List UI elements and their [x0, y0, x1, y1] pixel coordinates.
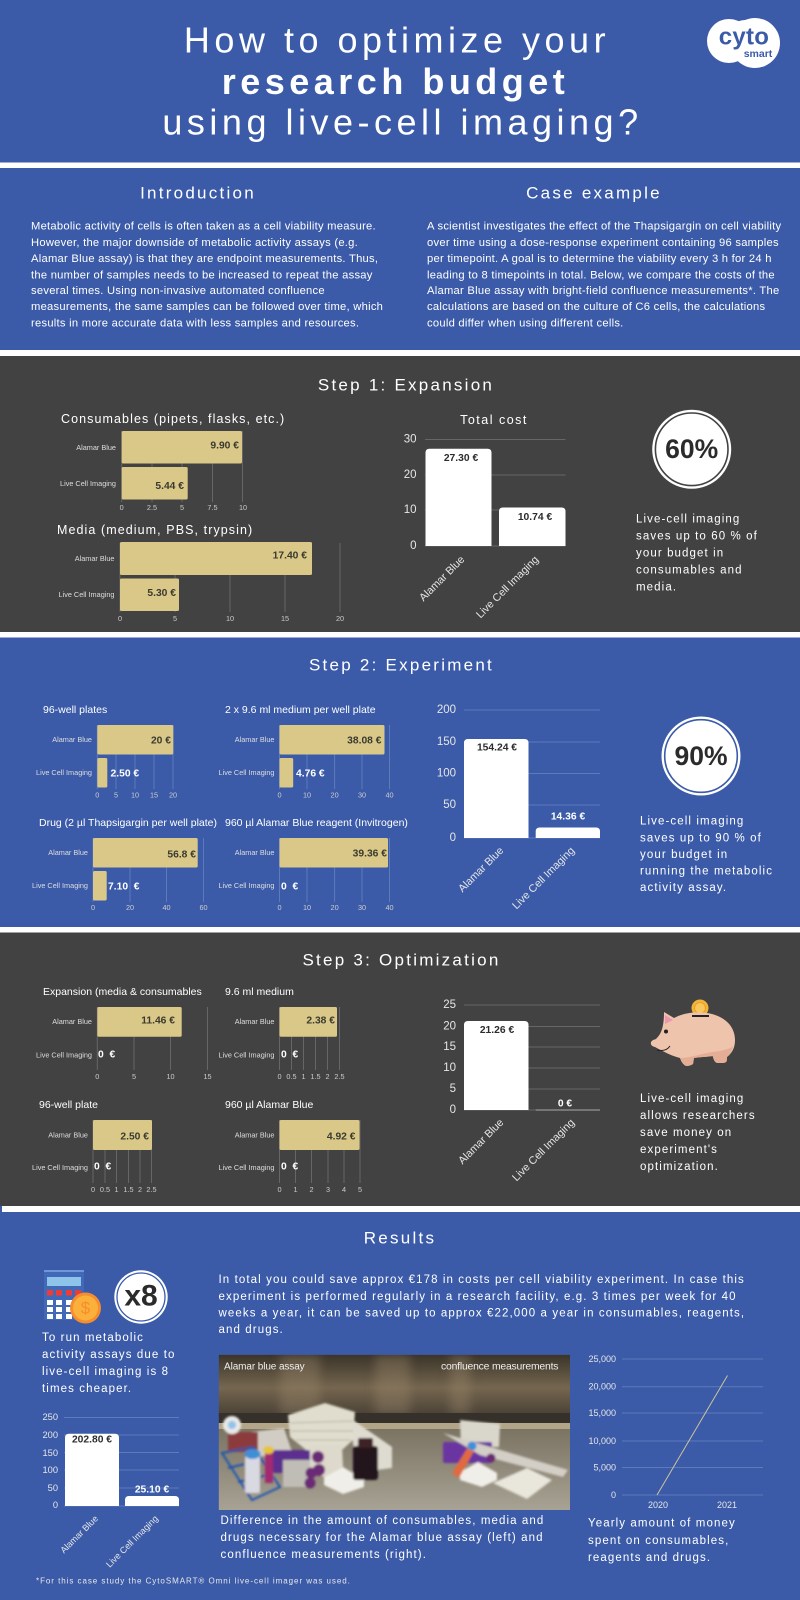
bar chart: alamar blue reagent: 39.36 €	[353, 848, 387, 860]
line chart: yearly savings: 15,000	[588, 1408, 616, 1418]
bar chart: medium per well plate: 0	[277, 790, 282, 800]
bar chart: consumables: Consumables (pipets, flasks, etc.)	[61, 412, 285, 426]
text block: introduction	[31, 220, 383, 330]
bar chart: 96-well plates: 20	[169, 790, 177, 800]
bar chart: drug: 40	[162, 903, 171, 912]
bar chart: media: 10	[226, 614, 234, 623]
panel: results	[36, 1228, 763, 1586]
bar chart: results total: 200	[42, 1430, 58, 1440]
bar chart: medium per well plate: 38.08 €	[347, 736, 382, 746]
bar chart: alamar blue reagent: Alamar Blue	[235, 848, 274, 857]
icon: cytosmart logo: cyto	[719, 24, 769, 50]
icon: 60 percent badge: 60%	[665, 434, 718, 464]
bar chart: medium per well plate: Live Cell Imaging	[219, 768, 274, 777]
text block: introduction: Metabolic activity of cells is often taken as a cell viability measure.	[31, 220, 376, 232]
bar chart: media: 5.30 €	[147, 588, 176, 599]
text block: step 1 savings: your budget in	[636, 548, 724, 560]
bar chart: alamar blue: 5	[358, 1185, 362, 1194]
bar chart: drug: 7.10 €	[108, 882, 140, 892]
bar chart: expansion: 10	[166, 1072, 175, 1081]
bar chart: total cost: Alamar Blue	[417, 554, 467, 604]
bar chart: medium: Live Cell Imaging	[219, 1050, 274, 1060]
text block: results summary: and drugs.	[218, 1324, 284, 1336]
text block: introduction: Alamar Blue assay) is that they are endpoint measurements. Thus,	[31, 253, 378, 265]
bar chart: total cost: 0	[410, 540, 416, 552]
bar chart: medium per well plate: 10	[303, 790, 311, 800]
bar chart: total cost	[404, 413, 566, 621]
line chart: yearly savings: 10,000	[588, 1436, 616, 1446]
panel: step 1 expansion	[0, 356, 800, 632]
bar chart: media: 17.40 €	[273, 550, 307, 562]
bar chart: medium per well plate: 40	[385, 790, 394, 800]
bar chart: consumables	[60, 412, 285, 512]
bar chart: alamar blue: 3	[326, 1185, 330, 1194]
bar chart: consumables: 0	[120, 503, 124, 512]
bar chart: medium per well plate: 30	[358, 790, 366, 800]
bar chart: medium: 0 €	[281, 1050, 298, 1060]
text block: step 1 savings: saves up to 60 % of	[636, 530, 758, 542]
bar chart: drug	[32, 817, 217, 912]
bar chart: medium: 1.5	[310, 1072, 321, 1081]
bar chart: medium: 2	[325, 1072, 330, 1081]
bar chart: alamar blue: 960 µl Alamar Blue	[225, 1099, 314, 1111]
footnote: *For this case study the CytoSMART® Omni live-cell imager was used.	[36, 1576, 351, 1586]
text block: 8 times cheaper: times cheaper.	[42, 1383, 132, 1395]
bar chart: step 3 total	[443, 999, 600, 1184]
bar chart: medium per well plate: 20	[331, 790, 339, 800]
bar chart: medium: Alamar Blue	[235, 1017, 274, 1026]
bar chart: medium	[219, 986, 345, 1081]
bar chart: 96-well plates: 96-well plates	[43, 704, 107, 716]
text block: step 1 savings: Live-cell imaging	[636, 514, 740, 526]
heading: step 3: Step 3: Optimization	[302, 950, 501, 970]
text block: step 2 savings	[640, 816, 773, 894]
text block: case example: calculations are based on the culture of C6 cells, the calculations	[427, 301, 765, 313]
text block: line chart caption: spent on consumables,	[588, 1535, 729, 1547]
text block: case example: over time using a dose-response experiment containing 96 samples	[427, 237, 779, 249]
icon: calculator and coin: $	[81, 1298, 91, 1318]
bar chart: total cost: 30	[404, 434, 416, 446]
bar chart: expansion: Live Cell Imaging	[36, 1050, 92, 1060]
icon: piggy bank	[651, 1000, 735, 1066]
bar chart: consumables: 2.5	[147, 503, 157, 512]
bar chart: 96-well plate: 2	[138, 1185, 142, 1194]
bar chart: 96-well plate: Alamar Blue	[48, 1130, 88, 1140]
bar chart: drug: 56.8 €	[167, 850, 196, 860]
heading: step 2: Step 2: Experiment	[309, 656, 494, 674]
bar chart: step 3 total: 0 €	[558, 1098, 572, 1110]
text block: 8 times cheaper: live-cell imaging is 8	[42, 1366, 169, 1378]
bar chart: results total: 250	[42, 1412, 58, 1422]
text block: step 3 savings: optimization.	[640, 1161, 719, 1173]
bar chart: results total: 50	[48, 1483, 58, 1493]
bar chart: step 3 total: 0	[450, 1104, 456, 1116]
bar chart: step 3 total: 21.26 €	[480, 1025, 514, 1036]
bar chart: expansion: 0	[95, 1072, 99, 1081]
text block: step 3 savings: save money on	[640, 1127, 732, 1139]
bar chart: results total: 202.80 €	[72, 1434, 112, 1446]
text block: results summary	[218, 1274, 745, 1336]
text block: line chart caption: Yearly amount of money	[588, 1518, 736, 1530]
bar chart: alamar blue reagent: 0	[277, 903, 282, 912]
text block: photo caption: confluence measurements (right).	[220, 1549, 427, 1561]
bar chart: 96-well plate: 1.5	[123, 1185, 134, 1194]
text block: photo caption: drugs necessary for the Alamar blue assay (left) and	[220, 1532, 544, 1544]
bar chart: alamar blue: 1	[293, 1185, 298, 1194]
icon: 60 percent badge	[652, 410, 731, 489]
bar chart: 96-well plate: 1	[114, 1185, 119, 1194]
bar chart: step 3 total: 5	[450, 1083, 456, 1095]
bar chart: alamar blue reagent: Live Cell Imaging	[219, 881, 274, 890]
bar chart: expansion: Expansion (media & consumables	[43, 986, 202, 998]
bar chart: step 2 total: 200	[437, 704, 456, 716]
photo: lab consumables comparison: Alamar blue assay	[224, 1362, 305, 1372]
text block: introduction: results in more accurate data with less samples and resources.	[31, 318, 359, 330]
text block: photo caption	[220, 1515, 544, 1561]
text block: case example	[427, 220, 782, 330]
bar chart: 96-well plates: 0	[95, 790, 99, 800]
text block: results summary: In total you could save approx €178 in costs per cell viability experiment. In case this	[218, 1274, 745, 1286]
bar chart: media	[57, 523, 344, 623]
bar chart: 96-well plates: 2.50 €	[110, 768, 139, 780]
bar chart: results total: 25.10 €	[135, 1484, 169, 1496]
bar chart: expansion: 11.46 €	[141, 1016, 175, 1026]
bar chart: expansion: 0 €	[98, 1050, 115, 1060]
line chart: yearly savings: 2020	[648, 1500, 668, 1510]
bar chart: alamar blue: Alamar Blue	[235, 1130, 274, 1140]
icon: x8 badge	[114, 1270, 168, 1324]
bar chart: media: 0	[118, 614, 122, 623]
bar chart: alamar blue reagent	[219, 817, 408, 912]
bar chart: expansion: 15	[203, 1072, 212, 1081]
bar chart: step 2 total: 100	[437, 768, 456, 780]
bar chart: step 3 total: 10	[443, 1062, 456, 1074]
bar chart: media: 20	[336, 614, 344, 623]
line chart: yearly savings: 2021	[717, 1500, 737, 1510]
bar chart: results total: 0	[53, 1500, 58, 1510]
bar chart: drug: 20	[126, 903, 134, 912]
line chart: yearly savings: 5,000	[593, 1462, 616, 1472]
bar chart: 96-well plate: 2.5	[146, 1185, 157, 1194]
text block: step 2 savings: saves up to 90 % of	[640, 832, 762, 844]
text block: case example: could differ when using different cells.	[427, 318, 624, 330]
text block: case example: per timepoint. A goal is to determine the viability every 3 h for 24 h	[427, 253, 772, 265]
bar chart: alamar blue reagent: 30	[358, 903, 366, 912]
bar chart: consumables: Alamar Blue	[76, 443, 116, 452]
bar chart: step 2 total	[437, 704, 600, 912]
bar chart: 96-well plates	[36, 704, 177, 800]
bar chart: medium: 0.5	[286, 1072, 297, 1081]
text block: introduction: measurements, the same samples can be followed over time, which	[31, 301, 383, 313]
bar chart: total cost: 10.74 €	[518, 512, 552, 523]
photo: lab consumables comparison	[219, 1355, 570, 1510]
bar chart: medium: 2.5	[334, 1072, 345, 1081]
bar chart: expansion	[36, 986, 212, 1081]
text block: case example: A scientist investigates the effect of the Thapsigargin on cell viability	[427, 220, 782, 232]
bar chart: drug: Alamar Blue	[48, 848, 88, 857]
text block: step 1 savings: consumables and	[636, 564, 743, 576]
panel: case example	[427, 184, 782, 330]
line chart: yearly savings: 20,000	[588, 1382, 616, 1392]
bar chart: results total: Alamar Blue	[58, 1513, 100, 1555]
bar chart: total cost: Live Cell Imaging	[474, 554, 541, 621]
text block: results summary: weeks a year, it can be saved up to approx €22,000 a year in consumables, reagents,	[218, 1308, 745, 1320]
bar chart: alamar blue reagent: 10	[303, 903, 311, 912]
bar chart: alamar blue: 2	[309, 1185, 314, 1194]
panel: header	[162, 18, 780, 142]
bar chart: consumables: 5.44 €	[155, 481, 184, 492]
text block: step 1 savings: media.	[636, 582, 677, 594]
bar chart: consumables: 10	[239, 503, 247, 512]
icon: calculator and coin	[44, 1270, 101, 1324]
bar chart: medium per well plate: 2 x 9.6 ml medium per well plate	[225, 704, 376, 716]
icon: x8 badge: x8	[124, 1280, 158, 1312]
title: research budget	[222, 61, 569, 102]
bar chart: 96-well plate: 0 €	[94, 1162, 111, 1172]
bar chart: step 2 total: 154.24 €	[477, 742, 517, 754]
bar chart: 96-well plate: Live Cell Imaging	[32, 1163, 88, 1172]
bar chart: drug: 0	[91, 903, 95, 912]
text block: step 2 savings: your budget in	[640, 849, 728, 861]
bar chart: medium: 9.6 ml medium	[225, 986, 294, 998]
bar chart: 96-well plate	[32, 1099, 157, 1194]
bar chart: total cost: Total cost	[460, 413, 528, 427]
bar chart: media: 5	[173, 614, 177, 623]
text block: case example: leading to 8 timepoints in total. Below, we compare the costs of the	[427, 270, 775, 282]
bar chart: alamar blue reagent: 40	[385, 903, 394, 912]
bar chart: medium: 1	[301, 1072, 306, 1081]
text block: step 3 savings	[640, 1093, 756, 1173]
bar chart: 96-well plate: 0	[91, 1185, 95, 1194]
bar chart: results total: 150	[42, 1448, 58, 1458]
bar chart: medium: 0	[277, 1072, 282, 1081]
bar chart: alamar blue reagent: 960 µl Alamar Blue reagent (Invitrogen)	[225, 817, 408, 829]
bar chart: alamar blue reagent: 20	[331, 903, 339, 912]
bar chart: 96-well plate: 0.5	[100, 1185, 110, 1194]
bar chart: total cost: 27.30 €	[444, 453, 478, 464]
bar chart: alamar blue: 4.92 €	[327, 1132, 356, 1142]
bar chart: step 3 total: 25	[443, 999, 456, 1011]
text block: step 3 savings: allows researchers	[640, 1110, 756, 1122]
bar chart: total cost: 20	[404, 469, 416, 481]
bar chart: medium per well plate: 4.76 €	[296, 768, 325, 780]
heading: case example: Case example	[526, 184, 662, 202]
bar chart: alamar blue: 0	[277, 1185, 282, 1194]
text block: step 2 savings: Live-cell imaging	[640, 816, 744, 828]
bar chart: step 2 total: Live Cell Imaging	[510, 845, 577, 912]
bar chart: alamar blue	[219, 1099, 362, 1194]
bar chart: step 2 total: Alamar Blue	[456, 845, 506, 895]
bar chart: consumables: 5	[180, 503, 184, 512]
text block: step 3 savings: Live-cell imaging	[640, 1093, 744, 1105]
bar chart: step 3 total: 15	[443, 1041, 456, 1053]
bar chart: alamar blue: 0 €	[281, 1162, 298, 1172]
bar chart: 96-well plates: 10	[131, 790, 139, 800]
text block: line chart caption	[588, 1518, 736, 1564]
text block: case example: Alamar Blue assay with bright-field confluence measurements*. The	[427, 285, 779, 297]
panel: step 3 optimization	[0, 932, 800, 1206]
bar chart: consumables: 7.5	[207, 503, 218, 512]
bar chart: alamar blue reagent: 0 €	[281, 882, 298, 892]
icon: 90 percent badge	[662, 716, 740, 796]
bar chart: 96-well plates: 20 €	[151, 736, 171, 746]
title: using live-cell imaging?	[162, 102, 643, 142]
text block: step 3 savings: experiment's	[640, 1144, 718, 1156]
heading: introduction: Introduction	[140, 184, 256, 202]
bar chart: step 2 total: 50	[443, 799, 456, 811]
bar chart: results total: Live Cell Imaging	[104, 1513, 160, 1569]
bar chart: step 2 total: 14.36 €	[551, 812, 585, 822]
bar chart: 96-well plates: 5	[114, 790, 118, 800]
bar chart: 96-well plate: 2.50 €	[120, 1132, 149, 1142]
icon: cytosmart logo: smart	[744, 48, 773, 60]
bar chart: media: Media (medium, PBS, trypsin)	[57, 523, 253, 537]
bar chart: 96-well plate: 96-well plate	[39, 1099, 98, 1111]
text block: 8 times cheaper: To run metabolic	[42, 1332, 144, 1344]
bar chart: step 3 total: Alamar Blue	[456, 1117, 506, 1167]
bar chart: step 2 total: 0	[450, 832, 456, 844]
text block: introduction: However, the major downside of metabolic activity assays (e.g.	[31, 237, 358, 249]
text block: 8 times cheaper	[42, 1332, 176, 1395]
bar chart: medium per well plate	[219, 704, 394, 800]
text block: line chart caption: reagents and drugs.	[588, 1552, 711, 1564]
text block: introduction: the number of samples needs to be increased to repeat the assay	[31, 270, 373, 282]
bar chart: step 3 total: 20	[443, 1020, 456, 1032]
text block: photo caption: Difference in the amount of consumables, media and	[220, 1515, 544, 1527]
line chart: yearly savings: 0	[611, 1490, 616, 1500]
bar chart: results total: 100	[42, 1465, 58, 1475]
bar chart: results total	[42, 1412, 179, 1569]
icon: cytosmart logo	[707, 18, 780, 68]
bar chart: drug: 60	[199, 903, 208, 912]
title	[162, 20, 643, 142]
bar chart: alamar blue: Live Cell Imaging	[219, 1163, 274, 1172]
photo: lab consumables comparison: confluence measurements	[441, 1362, 558, 1372]
bar chart: media: 15	[281, 614, 289, 623]
bar chart: step 3 total: Live Cell Imaging	[510, 1117, 577, 1184]
bar chart: media: Alamar Blue	[75, 554, 114, 563]
bar chart: step 2 total: 150	[437, 736, 456, 748]
bar chart: consumables: 9.90 €	[210, 440, 239, 452]
bar chart: expansion: Alamar Blue	[52, 1017, 92, 1026]
bar chart: drug: Drug (2 µl Thapsigargin per well plate)	[39, 817, 217, 829]
heading: step 1: Step 1: Expansion	[318, 376, 494, 394]
title: How to optimize your	[184, 20, 610, 60]
panel: introduction	[31, 184, 383, 330]
text block: step 2 savings: running the metabolic	[640, 866, 773, 878]
bar chart: consumables: Live Cell Imaging	[60, 479, 116, 488]
bar chart: media: Live Cell Imaging	[59, 590, 114, 599]
bar chart: medium per well plate: Alamar Blue	[235, 735, 274, 744]
text block: step 1 savings	[636, 514, 758, 594]
text block: introduction: several times. Using non-invasive automated confluence	[31, 285, 325, 297]
bar chart: drug: Live Cell Imaging	[32, 881, 88, 890]
bar chart: medium: 2.38 €	[306, 1016, 335, 1026]
icon: 90 percent badge: 90%	[674, 741, 728, 771]
bar chart: alamar blue: 4	[342, 1185, 346, 1194]
bar chart: 96-well plates: Live Cell Imaging	[36, 768, 92, 777]
bar chart: 96-well plates: Alamar Blue	[52, 735, 92, 744]
heading: results: Results	[364, 1228, 436, 1248]
text block: 8 times cheaper: activity assays due to	[42, 1349, 176, 1361]
bar chart: total cost: 10	[404, 504, 416, 516]
bar chart: 96-well plates: 15	[150, 790, 158, 800]
line chart: yearly savings: 25,000	[588, 1354, 616, 1364]
line chart: yearly savings	[588, 1354, 763, 1510]
text block: results summary: experiment is performed regularly in a research facility, e.g. 3 times per week for 40	[218, 1291, 737, 1303]
panel: step 2 experiment	[32, 656, 773, 912]
text block: step 2 savings: activity assay.	[640, 882, 727, 894]
bar chart: expansion: 5	[132, 1072, 136, 1081]
